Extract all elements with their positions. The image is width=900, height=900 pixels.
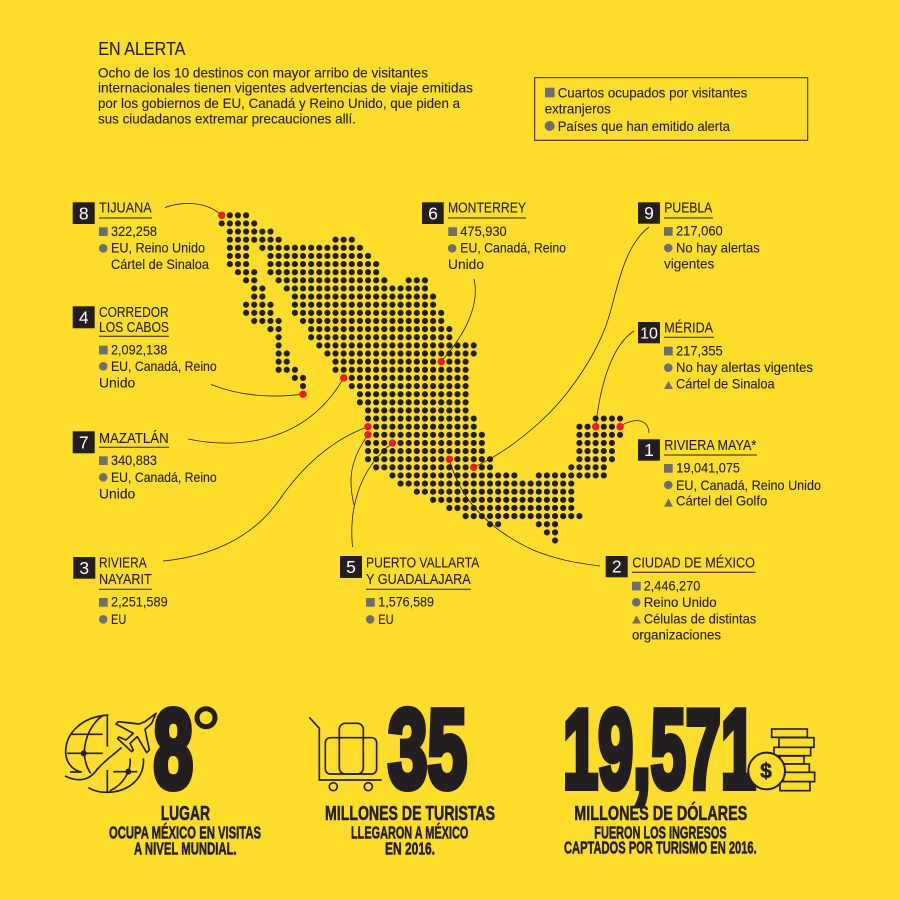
caption: lugar: LUGAR [161, 802, 210, 825]
panel: Tijuana: EU, Reino Unido [111, 240, 205, 256]
panel: Riviera Nayarit: RIVIERA [99, 555, 147, 572]
panel: Corredor Los Cabos: LOS CABOS [99, 319, 169, 336]
panel: Mazatlán: EU, Canadá, Reino [111, 469, 217, 485]
degree sign [197, 709, 215, 727]
panel: Corredor Los Cabos: Unido [99, 375, 135, 391]
panel: Mérida: 10 [640, 326, 658, 343]
panel: Mazatlán: 340,883 [111, 452, 157, 468]
dot map of Mexico [163, 203, 649, 566]
panel: Mazatlán [73, 430, 217, 502]
panel: Ciudad de México [606, 555, 756, 643]
stat: 8th place [65, 688, 261, 858]
stat: 19,571 million dollars [563, 688, 815, 858]
panel: Mazatlán: Unido [99, 486, 135, 502]
caption: lugar: OCUPA MÉXICO EN VISITAS [109, 821, 261, 842]
caption: dólares: CAPTADOS POR TURISMO EN 2016. [564, 838, 757, 858]
dollar sign: $ [760, 760, 772, 783]
panel: Corredor Los Cabos: 4 [79, 308, 89, 328]
panel: Ciudad de México: organizaciones [632, 627, 721, 643]
panel: Mazatlán: 7 [79, 432, 89, 452]
legend: Países que han emitido alerta [558, 118, 730, 134]
panel: Riviera Maya: Cártel del Golfo [676, 493, 767, 509]
icon: luggage cart [309, 717, 382, 791]
caption: dólares: FUERON LOS INGRESOS [594, 822, 727, 842]
panel: Puerto Vallarta y Guadalajara [340, 555, 479, 627]
intro text: sus ciudadanos extremar precauciones allí. [98, 111, 356, 127]
panel: Puerto Vallarta y Guadalajara: Y GUADALAJARA [366, 571, 471, 588]
legend: Cuartos ocupados por visitantes [558, 84, 747, 100]
panel: Mérida: Cártel de Sinaloa [676, 376, 775, 392]
big number: 8: 8 [154, 688, 193, 812]
big number: 19,571: 19,571 [563, 688, 756, 812]
big number: 35: 35 [388, 688, 467, 812]
caption: dólares: MILLONES DE DÓLARES [574, 801, 747, 825]
panel: Monterrey: MONTERREY [448, 200, 526, 217]
panel: Puebla: vigentes [664, 256, 714, 272]
panel: Puerto Vallarta y Guadalajara: 5 [346, 557, 356, 577]
panel: Ciudad de México: Reino Unido [644, 594, 717, 610]
panel: Monterrey: Unido [448, 256, 484, 272]
panel: Corredor Los Cabos [73, 304, 217, 391]
caption: lugar: A NIVEL MUNDIAL. [134, 838, 237, 858]
panel: Tijuana [73, 200, 209, 272]
panel: Riviera Maya: RIVIERA MAYA* [664, 437, 756, 454]
panel: Riviera Maya: EU, Canadá, Reino Unido [676, 477, 821, 493]
panel: Corredor Los Cabos: EU, Canadá, Reino [111, 358, 217, 374]
panel: Tijuana: 322,258 [111, 223, 157, 239]
icon: globe and plane [65, 713, 156, 792]
panel: Tijuana: TIJUANA [99, 200, 152, 217]
legend [535, 78, 808, 140]
panel: Mérida [638, 320, 813, 392]
panel: Riviera Maya [638, 437, 821, 509]
panel: Mazatlán: MAZATLÁN [99, 430, 169, 447]
caption: lugar [109, 802, 261, 858]
panel: Corredor Los Cabos: 2,092,138 [111, 341, 167, 357]
panel: Riviera Maya: 1 [644, 440, 654, 460]
panel: Riviera Nayarit: 3 [79, 558, 89, 578]
panel: Puerto Vallarta y Guadalajara: EU [378, 611, 394, 627]
panel: Puerto Vallarta y Guadalajara: PUERTO VALLARTA [366, 555, 479, 572]
panel: Puebla: PUEBLA [664, 200, 712, 217]
panel: Ciudad de México: 2,446,270 [644, 577, 700, 593]
panel: Monterrey: EU, Canadá, Reino [460, 240, 566, 256]
panel: Corredor Los Cabos: CORREDOR [99, 304, 169, 321]
panel: Mérida: No hay alertas vigentes [676, 359, 813, 375]
panel: Riviera Maya: 19,041,075 [676, 460, 740, 476]
caption: turistas [325, 802, 495, 858]
intro text: internacionales tienen vigentes advertencias de viaje emitidas [98, 80, 473, 96]
panel: Puebla: 217,060 [676, 223, 723, 239]
caption: dólares [564, 801, 757, 858]
caption: turistas: MILLONES DE TURISTAS [325, 802, 495, 825]
panel: Monterrey: 6 [428, 203, 438, 223]
intro text: por los gobiernos de EU, Canadá y Reino Unido, que piden a [98, 95, 460, 111]
panel: Mérida: MÉRIDA [664, 320, 713, 337]
caption: turistas: EN 2016. [385, 838, 435, 858]
title: EN ALERTA [98, 39, 185, 59]
panel: Tijuana: Cártel de Sinaloa [111, 256, 209, 272]
legend: extranjeros [545, 100, 611, 116]
caption: turistas: LLEGARON A MÉXICO [351, 821, 468, 842]
panel: Puebla: 9 [644, 203, 654, 223]
panel: Monterrey: 475,930 [460, 223, 507, 239]
red location markers [218, 212, 624, 471]
panel: Puebla: No hay alertas [676, 240, 760, 256]
intro text [98, 64, 473, 127]
panel: Ciudad de México: CIUDAD DE MÉXICO [632, 555, 755, 572]
panel: Mérida: 217,355 [676, 343, 723, 359]
stat: 35 million tourists [309, 688, 495, 858]
panel: Puerto Vallarta y Guadalajara: 1,576,589 [378, 594, 434, 610]
panel: Tijuana: 8 [79, 203, 89, 223]
panel: Riviera Nayarit: EU [111, 611, 126, 627]
panel: Riviera Nayarit: NAYARIT [99, 571, 152, 588]
connector lines [163, 203, 649, 566]
panel: Ciudad de México: Células de distintas [644, 611, 756, 627]
panel: Monterrey [422, 200, 566, 272]
panel: Puebla [638, 200, 760, 272]
panel: Riviera Nayarit: 2,251,589 [111, 594, 168, 610]
panel: Ciudad de México: 2 [612, 557, 622, 577]
intro text: Ocho de los 10 destinos con mayor arribo de visitantes [98, 64, 428, 80]
panel: Riviera Nayarit [73, 555, 168, 627]
icon: coins [748, 729, 815, 791]
